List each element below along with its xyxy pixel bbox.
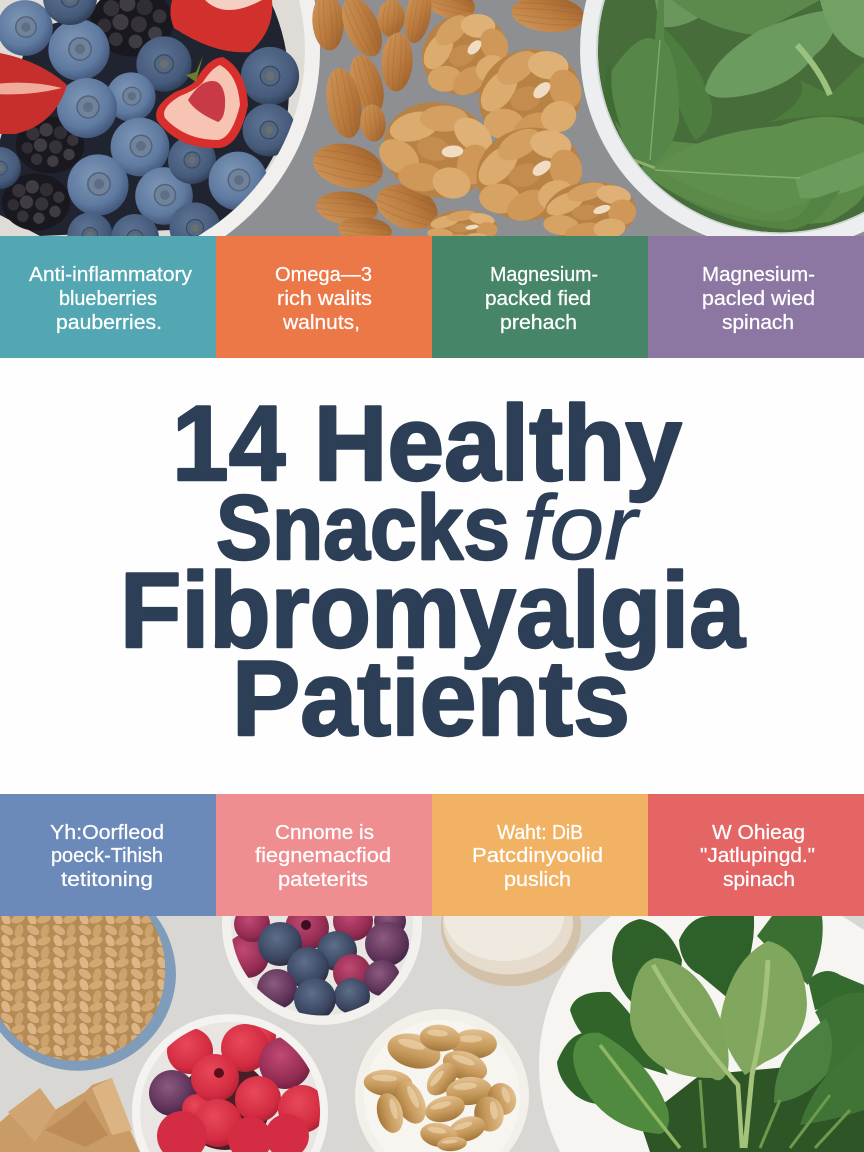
- panel: blue label: [0, 794, 216, 916]
- panel: pink label: Cnnome is: [275, 822, 374, 844]
- photo: nut plate: [355, 1009, 529, 1152]
- panel: teal blueberries label: pauberries.: [56, 312, 162, 334]
- panel: pink label: [216, 794, 432, 916]
- panel: orange walnuts label: rich walits: [277, 288, 372, 310]
- photo: ceramic dish: [441, 916, 581, 986]
- strawberry: right top: [170, 0, 272, 52]
- photo: berry bowl: [0, 0, 320, 262]
- panel: red label: [648, 794, 864, 916]
- title: [120, 383, 746, 758]
- photo: mixed berries bowl: [222, 916, 422, 1025]
- panel: pink label: pateterits: [278, 869, 368, 891]
- panel: orange walnuts label: Omega—3: [275, 264, 372, 286]
- panel: teal blueberries label: blueberries: [59, 288, 157, 310]
- panel: yellow label: Waht: DiB: [497, 822, 583, 844]
- band: bottom benefit labels: [0, 794, 864, 916]
- panel: green magnesium label: packed fied: [485, 288, 591, 310]
- band: top benefit labels: [0, 236, 864, 358]
- panel: purple spinach label: pacled wied: [702, 288, 815, 310]
- panel: orange walnuts label: [216, 236, 432, 358]
- panel: yellow label: Patcdinyoolid: [472, 845, 603, 867]
- panel: green magnesium label: prehach: [500, 312, 577, 334]
- strawberry: halved: [156, 56, 248, 148]
- photo: spinach bowl: [580, 0, 864, 250]
- photo: bottom foods: [0, 901, 864, 1152]
- photo: raspberry bowl: [132, 1014, 328, 1152]
- title: for: [522, 477, 641, 579]
- panel: teal blueberries label: [0, 236, 216, 358]
- panel: purple spinach label: Magnesium-: [702, 264, 815, 286]
- strawberry: left: [0, 52, 67, 134]
- panel: red label: "Jatlupingd.": [700, 845, 815, 867]
- title: Patients: [232, 638, 630, 758]
- photo: spinach plate: [539, 916, 864, 1152]
- panel: purple spinach label: [648, 236, 864, 358]
- photo: cinnamon chips: [0, 1078, 140, 1152]
- photo: top foods: [0, 0, 864, 262]
- panel: pink label: fiegnemacfiod: [255, 845, 391, 867]
- panel: blue label: Yh:Oorfleod: [50, 822, 164, 844]
- title: Fibromyalgia: [120, 550, 746, 670]
- panel: blue label: poeck-Tihish: [51, 845, 163, 867]
- panel: orange walnuts label: walnuts,: [282, 312, 360, 334]
- photo: oat bowl: [0, 916, 176, 1071]
- panel: blue label: tetitoning: [61, 869, 153, 891]
- almonds: [309, 0, 586, 245]
- panel: yellow label: puslich: [504, 869, 571, 891]
- panel: green magnesium label: [432, 236, 648, 358]
- panel: red label: W Ohieag: [712, 822, 805, 844]
- panel: green magnesium label: Magnesium-: [490, 264, 598, 286]
- title: 14 Healthy: [172, 383, 682, 503]
- walnuts: [379, 14, 636, 236]
- panel: teal blueberries label: Anti-inflammatory: [29, 264, 192, 286]
- panel: red label: spinach: [723, 869, 795, 891]
- title: Snacks: [216, 476, 510, 579]
- panel: purple spinach label: spinach: [722, 312, 794, 334]
- panel: yellow label: [432, 794, 648, 916]
